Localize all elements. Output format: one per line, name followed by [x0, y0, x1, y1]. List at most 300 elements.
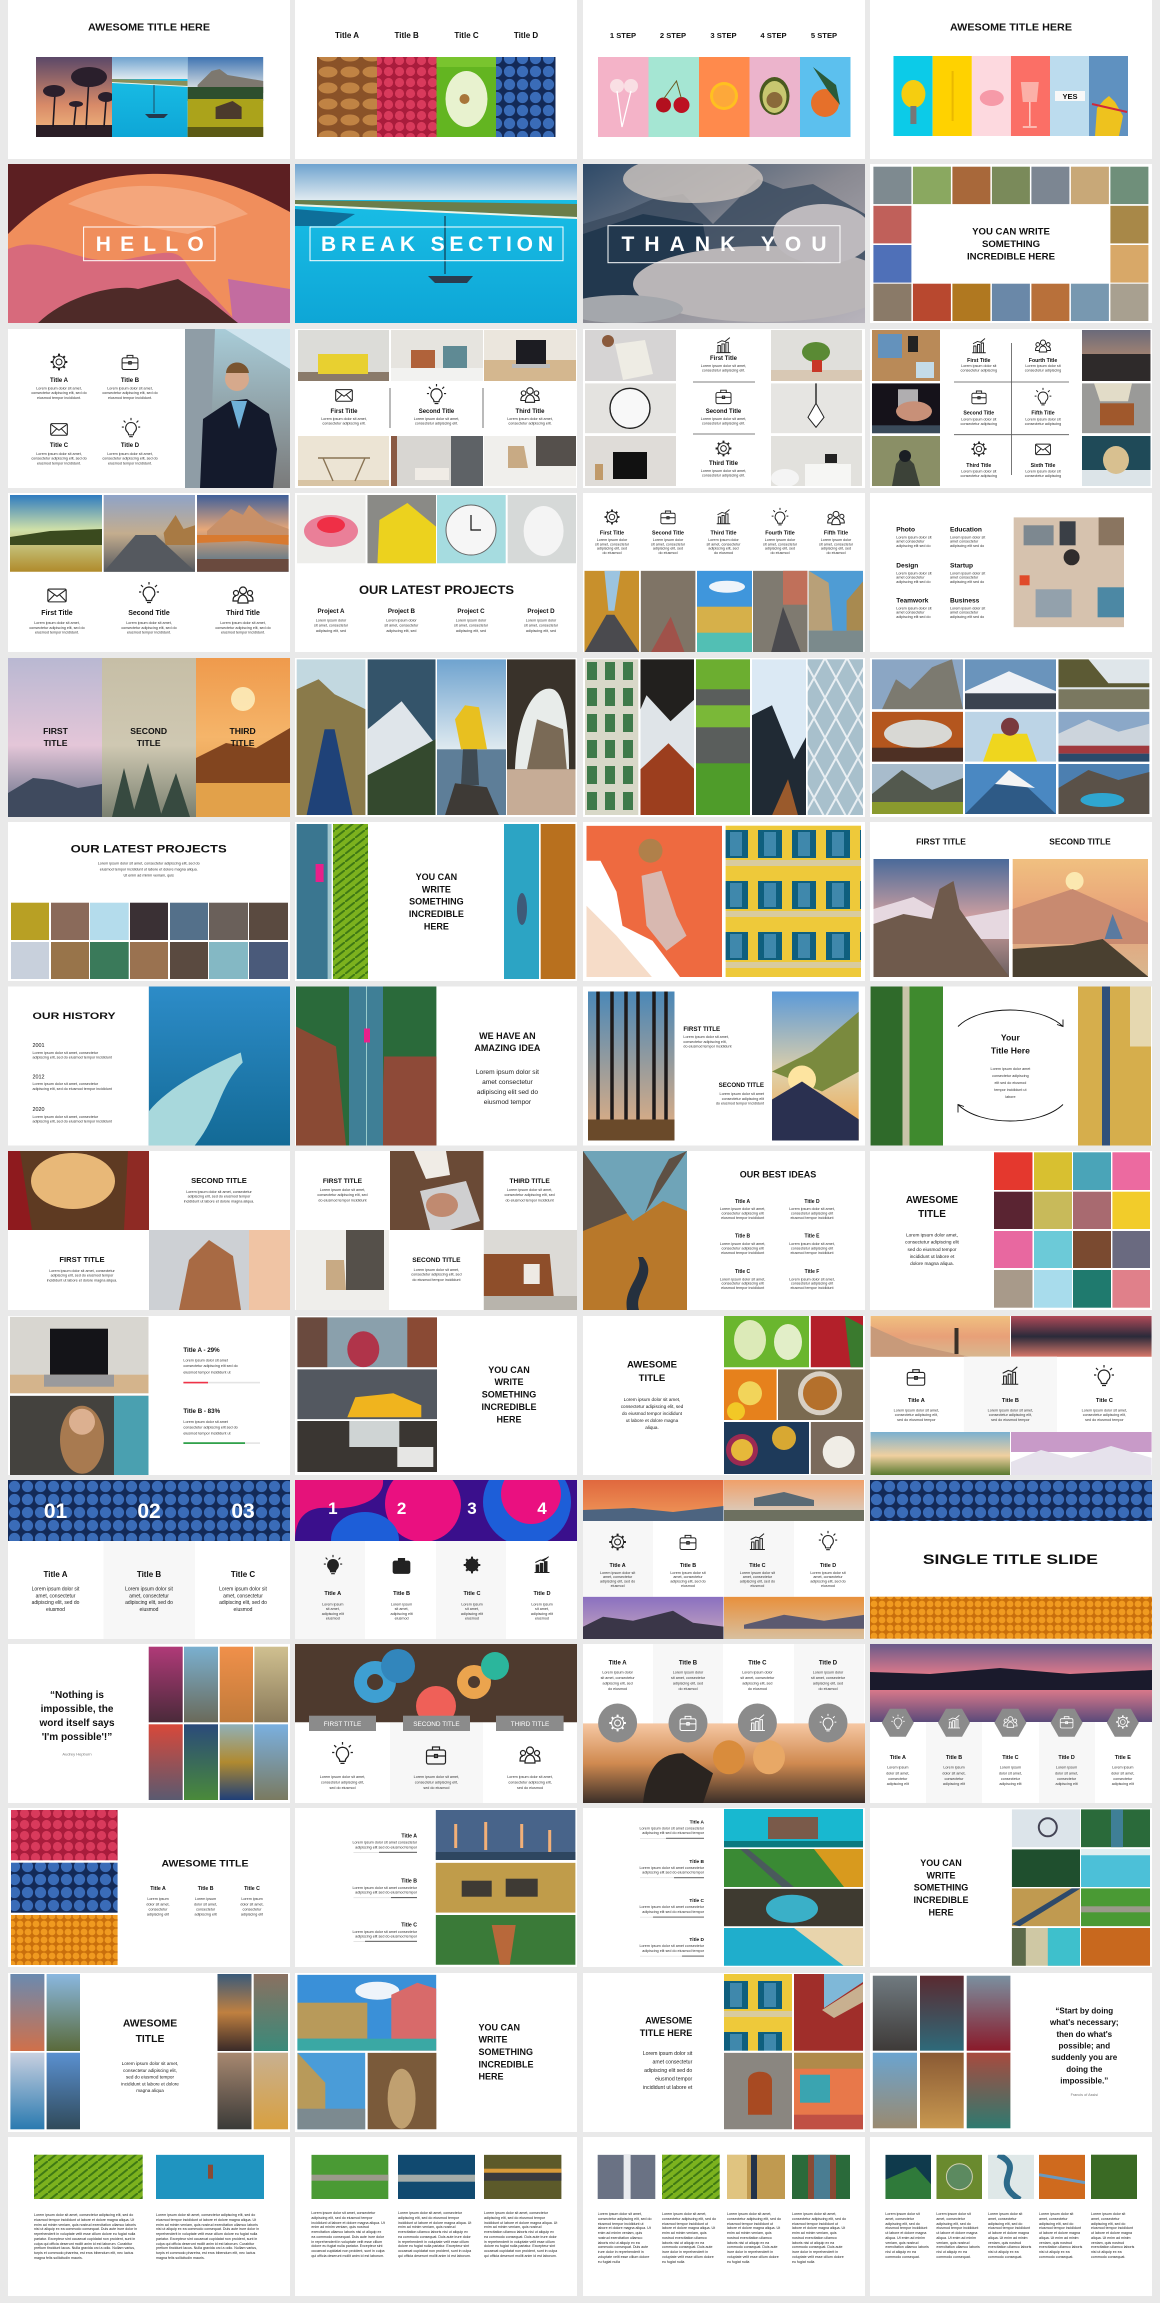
- photo: blueberries with numbers: 01: [44, 1500, 67, 1523]
- feature B: adipiscing elit, sed do: [670, 1580, 706, 1584]
- project A: Lorem ipsum dolor: [316, 618, 347, 622]
- photo: rock pillars: [872, 659, 963, 709]
- intro text: eiusmod tempor incididunt ut labore et dolore magna aliqua.: [100, 868, 198, 872]
- feature: second: Lorem ipsum dolor: [653, 538, 684, 542]
- project A: adipiscing elit, sed: [316, 629, 346, 633]
- statement text: INCREDIBLE: [913, 1895, 969, 1905]
- quote: possible; and: [1059, 2042, 1110, 2051]
- text: first title: [683, 1026, 732, 1048]
- photo: coast forest: [885, 2155, 931, 2200]
- feature A: Lorem ipsum dolor sit amet,: [894, 1408, 939, 1412]
- photo mosaic: travel frame: [873, 167, 1148, 321]
- photo: glass skyscraper: [752, 659, 806, 815]
- feature E: dolor sit amet,: [1111, 1772, 1134, 1776]
- feature: fourth: Lorem ipsum dolor: [765, 538, 796, 542]
- quote: [38, 1690, 115, 1756]
- photo: flat lay with shirt: [872, 330, 940, 381]
- idea C: Title C: [735, 1269, 751, 1275]
- feature B: consectetur adipiscing elit,: [989, 1413, 1032, 1417]
- column B: [668, 1660, 708, 1742]
- feature: second: Second Title: [419, 409, 455, 415]
- photo: turquoise bay: [295, 164, 577, 323]
- photo: laptop on brick wall: [585, 436, 676, 486]
- body text: Lorem ipsum dolor sit: [476, 1069, 539, 1076]
- column A: [598, 1660, 637, 1742]
- column B: [391, 1558, 413, 1621]
- timeline entry 2012: [32, 1074, 112, 1091]
- feature B: [670, 1535, 706, 1588]
- feature A: eiusmod tempor incididunt.: [37, 396, 81, 400]
- photo: chair and bookshelf: [484, 436, 576, 486]
- body text: eiusmod tempor: [655, 2076, 693, 2082]
- feature: third: Lorem ipsum dolor sit amet,: [701, 469, 746, 473]
- column A: Lorem ipsum dolor: [602, 1670, 634, 1674]
- item B: Lorem ipsum dolor sit amet consectetur: [352, 1886, 418, 1890]
- body text: consectetur adipiscing elit: [905, 1240, 960, 1244]
- heading: AWESOME: [123, 2018, 177, 2030]
- idea D: [789, 1199, 835, 1220]
- statement text: YOU CAN: [488, 1365, 530, 1375]
- photo: green field rows: [34, 2155, 143, 2199]
- feature A: [31, 354, 87, 400]
- text: second title: Lorem ipsum dolor sit amet,: [414, 1268, 459, 1272]
- column A: adipiscing elit: [147, 1913, 169, 1917]
- metric: title A 29 percent: consectetur adipiscing elit sed do: [183, 1364, 238, 1368]
- text: first title: Lorem ipsum dolor sit amet, consectetur: [49, 1269, 116, 1273]
- feature B: consectetur: [944, 1777, 964, 1781]
- slide: single title slide: [870, 1480, 1152, 1639]
- column A: Lorem ipsum: [322, 1602, 343, 1606]
- item D: adipiscing elit sed do eiusmod tempor: [642, 1949, 705, 1953]
- photo: YES tiles: [1050, 56, 1089, 136]
- feature B: adipiscing elit: [943, 1782, 965, 1786]
- column C: Title C: [748, 1660, 767, 1666]
- statement text: SOMETHING: [409, 897, 464, 907]
- photo: typing on laptop: [390, 1151, 484, 1230]
- feature A: consectetur adipiscing elit,: [895, 1413, 938, 1417]
- text: second title: SECOND TITLE: [719, 1082, 764, 1089]
- statement text: YOU CAN: [920, 1858, 962, 1868]
- feature: first: [961, 338, 997, 372]
- text: second title: SECOND TITLE: [191, 1176, 247, 1185]
- feature D: eiusmod: [821, 1584, 835, 1588]
- feature: second: Second Title: [652, 530, 684, 536]
- photo: leather armchair: [484, 1230, 578, 1310]
- feature: third: Third Title: [709, 461, 739, 467]
- feature C: consectetur: [1001, 1777, 1021, 1781]
- heading: AWESOME: [627, 1360, 678, 1370]
- statement text: WRITE: [926, 1870, 956, 1880]
- column B: Lorem ipsum dolor: [673, 1670, 704, 1674]
- column C: adipiscing elit: [461, 1612, 483, 1616]
- slide: nine mountain photos: [870, 658, 1152, 817]
- project D: Project D: [527, 608, 555, 615]
- column C: Lorem ipsum: [241, 1897, 263, 1901]
- feature: first: Lorem ipsum dolor sit amet,: [34, 621, 80, 625]
- photo: harvest hills: [10, 495, 102, 572]
- item C: Title C: [689, 1898, 705, 1904]
- label frame: THANK YOU: THANK YOU: [622, 233, 826, 256]
- heading: AMAZING IDEA: [474, 1043, 541, 1053]
- photo: coconuts: [811, 1422, 864, 1474]
- text: second title: [411, 1257, 462, 1282]
- photo: potted plant: [771, 330, 862, 381]
- quote: doing the: [1066, 2065, 1103, 2074]
- feature D: Lorem ipsum dolor sit: [810, 1571, 846, 1575]
- photo strip: road through red sky: [149, 1724, 183, 1800]
- column A: adipiscing elit, sed: [603, 1682, 633, 1686]
- feature: first: Lorem ipsum dolor sit: [961, 364, 996, 368]
- column highlights: [295, 1541, 506, 1639]
- slide: three titles with workspace photos: [295, 1151, 578, 1310]
- feature: first: [701, 338, 746, 372]
- topic: photo: Photo: [896, 526, 915, 534]
- timeline entry 2020: 2020: [32, 1107, 44, 1113]
- intro text: Lorem ipsum dolor sit amet, consectetur adipiscing elit, sed do: [98, 862, 200, 866]
- photo: white clock: [585, 384, 676, 434]
- photo strip: windmill: [184, 1724, 218, 1800]
- statement text: [481, 1365, 537, 1424]
- idea D: consectetur adipiscing elit: [791, 1212, 833, 1216]
- feature: third: Lorem ipsum dolor sit amet,: [507, 417, 553, 421]
- project A: sit amet, consectetur: [314, 623, 349, 627]
- photo: lake at pink sunset: [870, 1644, 1152, 1722]
- slide: two titles between photos: [583, 986, 865, 1146]
- photo: green apples: [724, 1316, 809, 1368]
- feature: fourth: consectetur adipiscing: [1025, 368, 1061, 372]
- idea B: consectetur adipiscing elit: [721, 1246, 764, 1250]
- photo: raspberries: [11, 1810, 118, 1860]
- photo: yellow sofa: [298, 330, 389, 381]
- text: second title: [184, 1176, 254, 1203]
- photo: green field rows: [662, 2155, 720, 2199]
- heading: Title Here: [991, 1046, 1030, 1056]
- column A: eiusmod: [326, 1617, 340, 1621]
- photo: cave opening: [872, 712, 963, 762]
- feature: second: [961, 391, 997, 426]
- photo: mandarin: [800, 57, 850, 137]
- statement text: SOMETHING: [482, 1390, 536, 1400]
- timeline entry 2012: 2012: [32, 1074, 44, 1080]
- column A: amet, consectetur: [36, 1594, 76, 1600]
- idea A: eiusmod tempor incididunt: [721, 1216, 764, 1220]
- feature C: [1082, 1365, 1127, 1422]
- feature: third: Lorem ipsum dolor: [708, 538, 740, 542]
- feature C: consectetur adipiscing elit, sed do: [31, 457, 87, 461]
- column A: [146, 1886, 170, 1917]
- body text: incididunt ut labore et dolore: [121, 2081, 179, 2086]
- metric: title A 29 percent: Lorem ipsum dolor sit amet: [183, 1358, 228, 1362]
- slide: audrey hepburn quote: [8, 1644, 290, 1803]
- statement text: [913, 1858, 969, 1917]
- feature C: amet, consectetur: [743, 1575, 773, 1579]
- slide: awesome title between city photos: [8, 1973, 290, 2132]
- feature: third: Third Title: [966, 463, 991, 469]
- photo: pink lake reflection: [1011, 1316, 1152, 1357]
- feature B: eiusmod: [681, 1584, 695, 1588]
- slide: break section: [295, 164, 577, 323]
- feature: fifth: Lorem ipsum dolor: [821, 538, 852, 542]
- photo: leather bag: [1082, 383, 1150, 434]
- item C: Lorem ipsum dolor sit amet consectetur: [352, 1930, 418, 1934]
- step titles: [610, 31, 837, 40]
- photo: aerial wheat and road: [1078, 986, 1151, 1146]
- photo: boat on blue water: [156, 2155, 264, 2200]
- project C: [454, 608, 489, 633]
- panel: second title foggy forest: [102, 658, 196, 817]
- feature: third: [706, 510, 741, 555]
- topic: startup: Startup: [950, 562, 973, 570]
- topic: teamwork: [896, 598, 932, 619]
- text: third title: consectetur adipiscing elit, sed: [504, 1193, 555, 1197]
- feature: first: eiusmod tempor incididunt.: [35, 631, 79, 635]
- column A: adipiscing elit, sed do: [32, 1600, 80, 1606]
- body text: do eiusmod tempor incididunt: [622, 1411, 683, 1416]
- label: third title: THIRD TITLE: [511, 1721, 549, 1728]
- photo: castle in fog: [724, 1480, 865, 1521]
- topic: education: Education: [950, 526, 982, 534]
- feature C: consectetur adipiscing elit,: [1083, 1413, 1126, 1417]
- project B: sit amet, consectetur: [384, 623, 419, 627]
- column B: Lorem ipsum: [195, 1897, 216, 1901]
- column titles: Title B: [395, 31, 419, 40]
- photo: misty mountains: [583, 164, 865, 323]
- photo: road through forest: [724, 1849, 863, 1887]
- metric: title A 29 percent: eiusmod tempor incididunt ut: [183, 1370, 231, 1374]
- photo: overwater bungalow: [724, 1809, 863, 1848]
- photo: snowy junction: [1012, 1809, 1081, 1847]
- body text: consectetur adipiscing elit,: [123, 2068, 177, 2073]
- slide: three landscape photos with features: [8, 493, 290, 652]
- photo: road through autumn forest: [484, 2155, 562, 2200]
- slide: blueberry banner with numbered columns: [8, 1480, 290, 1639]
- photo: laptop on desk: [484, 330, 576, 381]
- column B: adipiscing elit: [195, 1913, 217, 1917]
- photo: woman in car: [1082, 436, 1150, 486]
- topic: business: Business: [950, 598, 980, 604]
- timeline entry 2012: Lorem ipsum dolor sit amet, consectetur: [32, 1082, 99, 1086]
- feature E: adipiscing elit: [1112, 1782, 1134, 1786]
- column titles: Title D: [514, 31, 538, 40]
- project A: [314, 608, 349, 633]
- column B: Title B: [137, 1570, 161, 1579]
- slide: two couples photos with titles: [8, 1151, 290, 1310]
- body text: Lorem ipsum dolor sit: [643, 2051, 693, 2057]
- feature: sixth: [1025, 444, 1061, 478]
- photo: bookshelf and chair: [296, 1230, 389, 1310]
- photo: blueberries: [496, 57, 556, 137]
- body text: dolore magna aliqua.: [910, 1261, 954, 1266]
- body text: sed do eiusmod tempor: [908, 1247, 957, 1252]
- statement text: [967, 226, 1056, 262]
- feature: third: eiusmod tempor incididunt.: [221, 631, 265, 635]
- text column 5: Lorem ipsum dolor sit amet, consectetur adipiscing elit, sed do eiusmod tempor incididunt ut labore et dolore magna aliqua. Ut enim ad minim veniam, quis nostrud exercitation ullamco laboris nisi ut aliquip ex ea commodo consequat.: [1091, 2212, 1134, 2259]
- text: third title: Lorem ipsum dolor sit amet,: [507, 1188, 552, 1192]
- feature B: Title B: [1002, 1398, 1019, 1404]
- feature: second: Lorem ipsum dolor sit amet,: [701, 417, 746, 421]
- column B: Lorem ipsum: [391, 1602, 412, 1606]
- project C: Lorem ipsum dolor: [456, 618, 487, 622]
- photo: green trees: [1081, 1888, 1150, 1926]
- column A: dolor sit amet,: [146, 1902, 170, 1906]
- label: second title: [403, 1716, 470, 1731]
- body text: labore: [1005, 1095, 1016, 1099]
- photo: orange slice: [699, 57, 750, 137]
- topic: photo: [896, 526, 932, 548]
- photo: passion fruit: [724, 1422, 809, 1474]
- photo: blueberries with numbers: [8, 1480, 290, 1541]
- text: first title: FIRST TITLE: [59, 1255, 105, 1264]
- feature: second: Lorem ipsum dolor sit amet,: [414, 417, 459, 421]
- timeline entry 2001: 2001: [32, 1043, 44, 1049]
- feature: first: First Title: [967, 358, 991, 364]
- feature B: eiusmod tempor incididunt.: [108, 396, 152, 400]
- slide: photo frame mosaic with centred statement: [870, 164, 1152, 323]
- photo: white sideboard: [771, 436, 862, 486]
- item C: [352, 1922, 418, 1942]
- feature: fifth: [1025, 388, 1061, 426]
- arrow: bottom arc: [958, 1104, 1063, 1121]
- text: second title: consectetur adipiscing elit, sed: [411, 1273, 462, 1277]
- feature grid: [961, 338, 1061, 478]
- feature C: sed do eiusmod tempor: [1085, 1418, 1124, 1422]
- text: third title: [504, 1178, 555, 1202]
- feature: third: Third Title: [516, 409, 545, 415]
- quote: what's necessary;: [1049, 2018, 1119, 2027]
- project B: Project B: [388, 608, 416, 615]
- quote: “Nothing is: [50, 1690, 104, 1701]
- metric: title A 29 percent: [183, 1347, 260, 1383]
- column C: amet, consectetur: [223, 1594, 263, 1600]
- feature: first: consectetur adipiscing elit, sed do: [29, 626, 85, 630]
- column C: [461, 1557, 483, 1621]
- text: second title: adipiscing elit, sed do eiusmod tempor: [188, 1195, 251, 1199]
- item B: Lorem ipsum dolor sit amet consectetur: [639, 1866, 705, 1870]
- column C: adipiscing elit, sed do: [219, 1600, 267, 1606]
- heading: [627, 1360, 678, 1384]
- statement text: HERE: [478, 2072, 504, 2082]
- photo: golden tower: [47, 1974, 80, 2051]
- photo: dark tower and orange roof: [640, 659, 694, 815]
- feature: second: adipiscing elit, sed: [653, 547, 683, 551]
- slide: neon banner with four numbered columns: [295, 1458, 577, 1639]
- topic: design: amet consectetur: [896, 576, 925, 580]
- feature B: Title B: [680, 1563, 696, 1569]
- photo: sunglasses at sunset: [583, 1723, 865, 1803]
- feature D: consectetur adipiscing elit, sed do: [102, 457, 158, 461]
- column A: Title A: [150, 1886, 166, 1892]
- feature C: adipiscing elit: [999, 1782, 1021, 1786]
- photo strip: side street: [920, 2053, 964, 2128]
- idea B: Title B: [735, 1234, 751, 1240]
- photo: yellow paddle: [893, 56, 933, 136]
- photo: yellow taxi: [297, 1369, 437, 1419]
- banner: neon circles with numbers: [295, 1458, 577, 1568]
- feature: second: sit amet, consectetur: [651, 542, 686, 546]
- column highlights: [926, 1722, 1095, 1803]
- photo: venice canal bridge: [254, 1974, 288, 2051]
- column A: Lorem ipsum: [147, 1897, 169, 1901]
- photo: building windows: [585, 659, 638, 815]
- column C: adipiscing elit, sed: [742, 1682, 772, 1686]
- feature: first: sed do eiusmod: [329, 1786, 356, 1790]
- slide: our latest projects: [295, 493, 577, 652]
- text: third title: do eiusmod tempor incididunt: [506, 1198, 554, 1202]
- photo: shanghai skyline: [10, 2053, 44, 2129]
- text column 2: Lorem ipsum dolor sit amet, consectetur adipiscing elit, sed do eiusmod tempor incididunt ut labore et dolore magna aliqua. Ut enim ad minim veniam, quis nostrud exercitation ullamco laboris nisi ut aliquip ex ea commodo consequat. Duis aute irure dolor in reprehenderit in voluptate velit esse cillum dolore eu fugiat nulla pariatur. Excepteur sint occaecat cupidatat non proident, sunt in culpa qui officia deserunt mollit anim id est laborum. Curabitur pretium tincidunt lacus. Nulla gravida orci a odio. Nullam varius, turpis et commodo pharetra, est eros bibendum elit, nec luctus magna felis sollicitudin mauris.: [156, 2213, 259, 2260]
- heading: TITLE: [639, 1373, 666, 1384]
- idea F: [789, 1269, 835, 1290]
- feature A: [894, 1370, 939, 1422]
- feature D: dolor sit amet,: [1055, 1772, 1078, 1776]
- project B: adipiscing elit, sed: [386, 629, 416, 633]
- feature A: consectetur: [888, 1777, 908, 1781]
- metric: title A 29 percent: Title A - 29%: [183, 1347, 220, 1354]
- column A: Title A: [609, 1660, 627, 1666]
- feature B: [938, 1709, 970, 1786]
- heading: WE HAVE AN: [479, 1031, 536, 1041]
- slide: three features between landscape strips: [870, 1316, 1152, 1475]
- feature D: [1051, 1709, 1083, 1786]
- timeline entry 2020: adipiscing elit, sed do eiusmod tempor incididunt: [32, 1120, 112, 1124]
- column A: sit amet,: [326, 1607, 340, 1611]
- feature: first: sit amet, consectetur: [595, 542, 630, 546]
- feature: second: Lorem ipsum dolor sit: [961, 418, 996, 422]
- feature: second: consectetur adipiscing elit.: [415, 422, 458, 426]
- slide: right aligned items with wildlife photos: [295, 1808, 577, 1967]
- step titles: 3 STEP: [710, 31, 737, 40]
- feature: first: First Title: [600, 530, 624, 536]
- photo: blueberries: [11, 1863, 118, 1913]
- photo: golden meadow: [870, 1432, 1010, 1475]
- topic: photo: Lorem ipsum dolor sit: [896, 536, 932, 540]
- feature A: adipiscing elit, sed do: [600, 1580, 635, 1584]
- photo grid: sixteen colourful tiles: [994, 1152, 1150, 1308]
- feature: fifth: [819, 511, 854, 555]
- body text: consectetur adipiscing elit, sed: [621, 1404, 684, 1409]
- photo: forest road: [1081, 1809, 1150, 1847]
- photo: aerial road with pink car: [297, 824, 332, 979]
- topic: teamwork: Teamwork: [896, 598, 929, 604]
- photo: reflection lake: [1058, 659, 1149, 709]
- feature C: dolor sit amet,: [999, 1772, 1022, 1776]
- column B: Title B: [679, 1660, 698, 1666]
- idea E: consectetur adipiscing elit: [791, 1246, 833, 1250]
- feature: second: [414, 1747, 459, 1790]
- feature: first: [321, 390, 367, 426]
- label: third title: [496, 1716, 564, 1731]
- feature A: dolor sit amet,: [886, 1772, 909, 1776]
- feature C: eiusmod tempor incididunt.: [37, 461, 81, 465]
- item B: adipiscing elit sed do eiusmod tempor: [642, 1870, 705, 1874]
- topic: business: amet consectetur: [950, 611, 979, 615]
- feature A: adipiscing elit: [887, 1782, 909, 1786]
- panel: first title misty lake: TITLE: [44, 738, 68, 748]
- heading: TITLE: [918, 1209, 946, 1220]
- slide: woman on stairs and yellow facade: [583, 822, 865, 981]
- photo: spice bowl: [778, 1369, 863, 1420]
- slide: awesome title with three photos: [8, 0, 290, 159]
- feature D: amet, consectetur: [813, 1575, 843, 1579]
- photo: orange wall with wheel: [794, 2053, 863, 2130]
- slide: five features above city photos: [583, 493, 865, 653]
- photo strip: orange beach: [220, 1647, 253, 1722]
- column C: dolor sit amet,: [240, 1902, 264, 1906]
- photo: green apple: [436, 57, 496, 137]
- topic: education: amet consectetur: [950, 540, 979, 544]
- feature B: consectetur adipiscing elit, sed do: [102, 391, 158, 395]
- item C: Title C: [401, 1922, 417, 1928]
